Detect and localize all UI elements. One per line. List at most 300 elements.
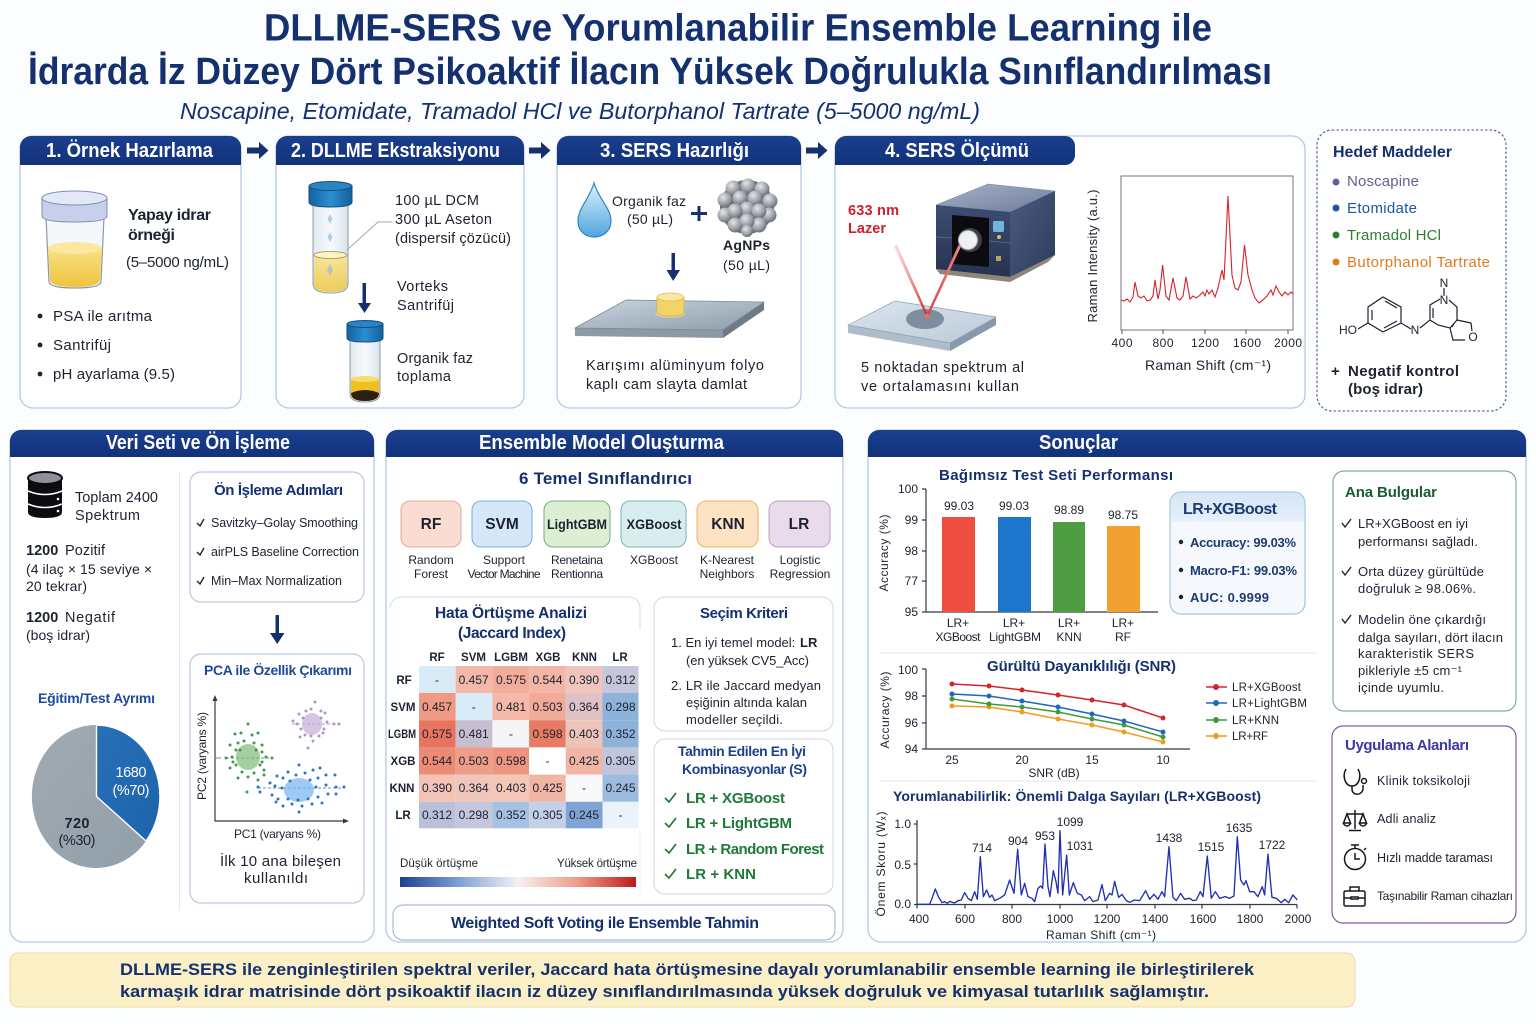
icon: molecule: N (1440, 276, 1448, 290)
box: PCA: kullanıldı (244, 870, 308, 887)
heatmap: 0.403 (496, 781, 526, 795)
list: drugs: Butorphanol Tartrate (1347, 254, 1490, 271)
panel: Ensemble Model Oluşturma (386, 430, 843, 942)
box: selection criteria: modeller seçildi. (686, 712, 783, 727)
icon: stethoscope (1344, 769, 1366, 794)
chart: bar chart: 98.89 (1054, 503, 1084, 517)
box: key findings: doğruluk ≥ 98.06%. (1358, 581, 1476, 596)
box: best combinations: Kombinasyonlar (S) (682, 761, 807, 777)
chart: feature importance: 1438 (1156, 831, 1183, 845)
classifier: LR: Regression (770, 567, 830, 581)
list: drugs: Noscapine (1347, 173, 1419, 190)
color scale legend: Yüksek örtüşme (557, 858, 637, 870)
heatmap: - (618, 808, 622, 822)
classifier: LR: Logistic (780, 553, 820, 567)
box: key findings: Orta düzey gürültüde (1358, 564, 1484, 579)
chart: SNR lines: 98 (905, 689, 918, 703)
box: selection criteria: LR (800, 635, 818, 650)
heatmap: LGBM (388, 729, 416, 741)
list: drugs: Tramadol HCl (1347, 227, 1441, 244)
chart: bar chart: 100 (898, 482, 918, 496)
chart: feature importance: 1800 (1237, 912, 1264, 926)
text: negative: Negatif (65, 610, 116, 626)
classifier: XGBoost (621, 501, 686, 567)
chart: feature importance: 904 (1008, 834, 1028, 848)
arrow: down (666, 253, 680, 281)
box: application areas: Uygulama Alanları (1345, 737, 1469, 754)
chart: bar chart: LightGBM (989, 630, 1041, 644)
legend: SNR (1206, 682, 1307, 743)
chart: PCA scatter: PC2 (varyans %) (195, 712, 209, 800)
heatmap: 0.352 (605, 727, 636, 741)
heatmap: RF (396, 675, 412, 687)
classifier: RF: Forest (414, 567, 449, 581)
box: best combinations (654, 739, 833, 894)
chart: Raman spectrum: 1600 (1233, 336, 1261, 350)
heatmap: RF (429, 652, 445, 664)
icon: database (28, 472, 62, 518)
box: preprocessing: Ön İşleme Adımları (214, 482, 343, 499)
chart: Raman spectrum: 400 (1112, 336, 1133, 350)
box: key findings (1333, 471, 1516, 711)
chart: feature importance: 600 (955, 912, 975, 926)
heatmap: 0.544 (422, 754, 452, 768)
heatmap: 0.245 (605, 781, 636, 795)
chart: bar chart: 98.75 (1108, 508, 1138, 522)
leader line (347, 222, 392, 250)
list: drugs: Etomidate (1347, 200, 1417, 217)
text: measure: ve ortalamasını kullan (861, 379, 1019, 395)
box: soft voting (393, 905, 835, 940)
heatmap: 0.312 (422, 808, 452, 822)
icon: molecule: O (1468, 330, 1478, 344)
chart: pie: (%30) (58, 833, 96, 849)
color scale legend (400, 858, 637, 887)
box: key findings: karakteristik SERS (1358, 646, 1474, 661)
chart: bar chart: LR+ (947, 616, 969, 630)
icon: slide with droplet (575, 293, 764, 338)
classifier: KNN: Neighbors (700, 567, 754, 581)
text: positive: 1200 (26, 543, 58, 559)
heatmap: LR (612, 652, 628, 664)
heatmap: 0.425 (532, 781, 563, 795)
label: laser (848, 203, 899, 237)
text: negative control: (boş idrar) (1348, 381, 1423, 398)
text: negative control: + (1331, 363, 1340, 380)
text: instruction: Karışımı alüminyum folyo (586, 358, 764, 374)
heatmap: 0.298 (605, 700, 636, 714)
panel: Sonuçlar (868, 430, 1526, 942)
heatmap: - (435, 673, 439, 687)
icon: spectrometer (936, 184, 1055, 282)
text: total spectra: Spektrum (75, 508, 140, 524)
classifier: KNN: K-Nearest (700, 553, 755, 567)
box: best combinations: LR + LightGBM (686, 815, 792, 832)
chart: bar chart: XGBoost (936, 630, 981, 644)
box: preprocessing: Min–Max Normalization (211, 574, 342, 588)
box: key findings: LR+XGBoost en iyi (1358, 516, 1468, 531)
heatmap: 0.312 (605, 673, 636, 687)
heatmap: 0.390 (569, 673, 599, 687)
icon: tube with solvent (309, 182, 352, 293)
heatmap: 0.481 (459, 727, 489, 741)
panel: Hedef Maddeler (1317, 130, 1506, 411)
chart: SNR lines: 20 (1015, 753, 1029, 767)
legend: SNR: LR+RF (1232, 731, 1268, 743)
box: selection criteria: eşiğinin altında kalan (686, 695, 807, 710)
box: best combinations: Tahmin Edilen En İyi (678, 743, 806, 759)
footer: conclusion: karmaşık idrar matrisinde dört psikoaktif ilacın iz düzey sınıflandırılmasında yüksek doğruluk ve kimyasal tutarlılık sağlamıştır. (120, 982, 1209, 1001)
heading: Sonuçlar (1039, 432, 1118, 454)
text: instruction: kaplı cam slayta damlat (586, 377, 747, 393)
text: organic phase: Organik faz (397, 351, 473, 367)
chart: Raman spectrum: Raman Shift (cm⁻¹) (1145, 357, 1271, 373)
chart: feature importance: Önem Skoru (Wₓ) (874, 812, 888, 916)
chart: SNR lines: 10 (1156, 753, 1170, 767)
box: key findings: pikleriyle ±5 cm⁻¹ (1358, 663, 1463, 678)
heatmap: 0.364 (459, 781, 489, 795)
chart: bar chart (877, 482, 1158, 644)
panel: Jaccard heatmap (388, 597, 640, 895)
text: organic phase (612, 193, 686, 227)
text: AgNPs: (50 µL) (723, 257, 770, 273)
icon: molecule: N (1440, 293, 1448, 307)
list: drugs (1332, 173, 1490, 271)
chart: feature importance: 714 (972, 841, 992, 855)
classifier: SVM: Vector Machine (468, 567, 541, 581)
text: total spectra (75, 490, 158, 524)
text: measure (861, 360, 1024, 395)
text: negative control (1331, 363, 1459, 398)
chart: bar chart: RF (1115, 630, 1131, 644)
chart: feature importance: 1000 (1047, 912, 1074, 926)
text: reagents: 300 µL Aseton (395, 212, 492, 228)
icon: urine cup (42, 191, 107, 288)
box: application areas: Taşınabilir Raman cihazları (1377, 889, 1513, 903)
heading: step 1: 1. Örnek Hazırlama (46, 139, 214, 162)
subtitle: Noscapine, Etomidate, Tramadol HCl ve Butorphanol Tartrate (5–5000 ng/mL) (180, 98, 980, 124)
chart: feature importance: 400 (909, 912, 929, 926)
chart: pie: 720 (64, 816, 90, 832)
text: positive (26, 543, 152, 594)
classifier: XGBoost: XGBoost (630, 553, 679, 567)
heatmap (388, 652, 638, 828)
chart: Raman spectrum: Raman Intensity (a.u.) (1085, 190, 1100, 322)
chart: SNR lines (878, 663, 1190, 780)
text: negative (26, 610, 116, 643)
chart: SNR lines: 96 (905, 716, 918, 730)
classifier: SVM: Support (483, 553, 526, 567)
heatmap: 0.598 (496, 754, 526, 768)
panel: 3. SERS Hazırlığı (557, 136, 801, 408)
heatmap: LGBM (494, 652, 528, 664)
box: key findings: Modelin öne çıkardığı (1358, 612, 1486, 627)
heatmap: 0.364 (569, 700, 599, 714)
box: selection criteria (654, 597, 833, 731)
text: instruction (586, 358, 764, 393)
heading: step 2: 2. DLLME Ekstraksiyonu (291, 140, 500, 162)
classifier: RF (401, 501, 461, 581)
heatmap: KNN (572, 652, 597, 664)
heatmap: 0.457 (459, 673, 489, 687)
bullet list: PSA ile arıtma (53, 308, 153, 325)
heading: interpretability: Yorumlanabilirlik: Önemli Dalga Sayıları (LR+XGBoost) (893, 788, 1261, 804)
chart: feature importance: 1635 (1226, 821, 1253, 835)
text: reagents (395, 193, 511, 247)
panel: Jaccard heatmap: Hata Örtüşme Analizi (435, 605, 587, 622)
legend: SNR: LR+LightGBM (1232, 698, 1307, 710)
classifier: KNN: KNN (711, 516, 745, 533)
box: key findings: içinde uyumlu. (1358, 680, 1444, 695)
heatmap: SVM (391, 702, 415, 714)
text: sample (126, 207, 229, 271)
icon: molecule: N (1411, 323, 1419, 337)
text: sample: (5–5000 ng/mL) (126, 254, 229, 271)
text: total spectra: Toplam 2400 (75, 490, 158, 506)
chart: feature importance (874, 812, 1312, 942)
legend: SNR: LR+XGBoost (1232, 682, 1302, 694)
heatmap: SVM (461, 652, 486, 664)
box: selection criteria: 1. En iyi temel model: (671, 635, 795, 650)
text: reagents: 100 µL DCM (395, 193, 479, 209)
box: selection criteria: Seçim Kriteri (700, 605, 788, 622)
chart: feature importance: 1515 (1198, 840, 1225, 854)
chart: bar chart: 95 (905, 605, 918, 619)
heading: split: Eğitim/Test Ayrımı (38, 690, 155, 706)
arrow: down (270, 615, 284, 644)
chart: bar chart: LR+ (1112, 616, 1134, 630)
box: PCA: İlk 10 ana bileşen (220, 852, 341, 870)
chart: feature importance: 1.0 (894, 817, 911, 831)
laser beams (894, 244, 961, 318)
text: negative control: Negatif kontrol (1348, 363, 1459, 380)
plus (691, 206, 707, 221)
text: negative: 1200 (26, 610, 58, 626)
heatmap: KNN (390, 783, 414, 795)
text: AgNPs (723, 237, 770, 273)
classifier: LightGBM: Rentionna (551, 567, 603, 581)
text: organic phase: (50 µL) (627, 211, 673, 227)
chart: bar chart: LR+ (1003, 616, 1025, 630)
legend: SNR: LR+KNN (1232, 715, 1279, 727)
chart: feature importance: 1722 (1259, 838, 1286, 852)
chart: pie: (%70) (112, 783, 150, 799)
panel: 4. SERS Ölçümü (835, 136, 1305, 408)
box: LR+XGBoost metrics: Accuracy: 99.03% (1190, 535, 1296, 550)
text: vortex: Vorteks (397, 279, 448, 295)
chart: bar chart: LR+ (1058, 616, 1080, 630)
classifier: XGBoost: XGBoost (626, 516, 682, 532)
arrow: down (358, 283, 371, 313)
chart: bar chart: Accuracy (%) (877, 514, 891, 592)
heading: SNR: Gürültü Dayanıklılığı (SNR) (987, 658, 1176, 675)
text: AgNPs: AgNPs (723, 237, 770, 253)
chart: feature importance: 1031 (1067, 839, 1094, 853)
chart: bar chart: 77 (905, 574, 918, 588)
title: İdrarda İz Düzey Dört Psikoaktif İlacın Yüksek Doğrulukla Sınıflandırılması (28, 51, 1272, 93)
classifier: KNN (697, 501, 758, 581)
heatmap: 0.305 (532, 808, 563, 822)
heatmap: 0.503 (459, 754, 489, 768)
box: LR+XGBoost metrics: AUC: 0.9999 (1190, 590, 1269, 605)
icon: drop (578, 183, 611, 237)
chart: SNR lines: Accuracy (%) (878, 672, 892, 748)
arrow: 2 to 3 (529, 142, 550, 159)
heatmap: 0.481 (496, 700, 526, 714)
classifier: SVM: SVM (485, 516, 519, 533)
text: positive: (4 ilaç × 15 seviye × (26, 561, 152, 577)
icon: molecule: HO (1339, 323, 1357, 337)
classifier: LR: LR (789, 516, 809, 533)
heatmap: 0.544 (532, 673, 563, 687)
chart: Raman spectrum: 800 (1152, 336, 1174, 350)
icon: sample slide (848, 301, 996, 351)
classifier: LightGBM (544, 501, 610, 581)
box: application areas: Hızlı madde taraması (1377, 851, 1493, 865)
heatmap: 0.598 (532, 727, 563, 741)
panel: 2. DLLME Ekstraksiyonu (276, 136, 524, 408)
heatmap: 0.305 (605, 754, 636, 768)
chart: SNR lines: 25 (945, 753, 959, 767)
box: LR+XGBoost metrics: LR+XGBoost (1183, 501, 1278, 518)
heatmap: - (546, 754, 550, 768)
box: application areas (1332, 726, 1516, 923)
heading: test set: Bağımsız Test Seti Performansı (939, 467, 1173, 484)
chart: PCA scatter: PC1 (varyans %) (234, 827, 321, 841)
chart: feature importance: 0.5 (894, 858, 911, 872)
icon: AgNP cluster (718, 178, 778, 237)
classifier: SVM (468, 501, 541, 581)
icon: toolbox (1344, 887, 1365, 906)
text: sample: Yapay idrar (128, 207, 211, 224)
box: PCA (190, 654, 364, 903)
text: sample: örneği (128, 227, 175, 244)
panel: 1. Örnek Hazırlama (20, 136, 241, 408)
title: DLLME-SERS ve Yorumlanabilir Ensemble Learning ile (264, 8, 1212, 50)
chart: feature importance: 1600 (1190, 912, 1217, 926)
chart: SNR lines: 100 (898, 663, 918, 677)
text: negative: (boş idrar) (26, 627, 90, 643)
heatmap: LR (395, 810, 411, 822)
text: organic phase: toplama (397, 369, 452, 385)
heatmap: - (472, 700, 476, 714)
chart: bar chart: 98 (905, 544, 918, 558)
box: PCA: PCA ile Özellik Çıkarımı (204, 662, 352, 678)
footer: conclusion: DLLME-SERS ile zenginleştirilen spektral veriler, Jaccard hata örtüşmesine dayalı yorumlanabilir ensemble learning ile birleştirilerek (120, 960, 1255, 979)
heatmap: 0.457 (422, 700, 452, 714)
heatmap: 0.575 (422, 727, 452, 741)
chart: SNR lines: 15 (1085, 753, 1099, 767)
label: laser: 633 nm (848, 203, 899, 219)
box: preprocessing (190, 472, 364, 602)
chart: PCA scatter (195, 695, 349, 841)
box: best combinations: LR + Random Forest (686, 841, 824, 858)
heading: Veri Seti ve Ön İşleme (106, 431, 290, 454)
icon: stopwatch (1344, 845, 1366, 870)
text: vortex: Santrifüj (397, 298, 454, 314)
color scale legend: Düşük örtüşme (400, 858, 478, 870)
heading: step 3: 3. SERS Hazırlığı (600, 140, 749, 162)
icon: scales (1343, 810, 1367, 830)
classifier: LR (769, 501, 830, 581)
chart: feature importance: Raman Shift (cm⁻¹) (1046, 928, 1156, 942)
heatmap: 0.575 (496, 673, 526, 687)
footer: conclusion (10, 953, 1355, 1007)
classifier: LightGBM: Renetaina (551, 553, 603, 567)
heatmap: 0.352 (496, 808, 526, 822)
chart: Raman spectrum (1085, 176, 1302, 373)
icon: tube organic phase (347, 320, 383, 402)
box: application areas: Klinik toksikoloji (1377, 774, 1470, 788)
heatmap: - (582, 781, 586, 795)
chart: feature importance: 1400 (1142, 912, 1169, 926)
box: key findings: dalga sayıları, dört ilacın (1358, 630, 1503, 645)
box: LR+XGBoost metrics (1170, 492, 1305, 614)
heading: step 4: 4. SERS Ölçümü (885, 139, 1029, 162)
heatmap: XGB (391, 756, 415, 768)
bullet list: pH ayarlama (9.5) (53, 366, 175, 383)
chart: SNR lines: 94 (905, 742, 918, 756)
chart: bar chart: 99.03 (999, 499, 1029, 513)
heading: classifiers: 6 Temel Sınıflandırıcı (519, 469, 692, 488)
heading: Ensemble Model Oluşturma (479, 432, 725, 454)
heatmap: 0.390 (422, 781, 452, 795)
chart: SNR lines: SNR (dB) (1028, 766, 1080, 780)
box: selection criteria: (en yüksek CV5_Acc) (686, 653, 809, 668)
box: soft voting: Weighted Soft Voting ile Ensemble Tahmin (451, 915, 759, 932)
chart: pie (32, 725, 160, 868)
box: application areas: Adli analiz (1377, 812, 1436, 826)
box: LR+XGBoost metrics: Macro-F1: 99.03% (1190, 563, 1297, 578)
chart: bar chart: 99.03 (944, 499, 974, 513)
text: organic phase: Organik faz (612, 193, 686, 209)
classifier: RF: RF (421, 516, 441, 533)
label: laser: Lazer (848, 221, 886, 237)
chart: feature importance: 953 (1035, 829, 1055, 843)
arrow: 3 to 4 (806, 142, 828, 159)
heatmap: XGB (536, 652, 560, 664)
box: key findings: performansı sağladı. (1358, 534, 1478, 549)
text: reagents: (dispersif çözücü) (395, 231, 511, 247)
chart: feature importance: 1099 (1057, 815, 1084, 829)
heatmap: 0.245 (569, 808, 599, 822)
chart: pie: 1680 (116, 765, 146, 781)
heatmap: - (509, 727, 513, 741)
chart: bar chart: 99 (905, 513, 918, 527)
chart: feature importance: 0.0 (894, 897, 911, 911)
icon: molecule (1339, 276, 1478, 344)
box: best combinations: LR + XGBoost (686, 790, 785, 807)
text: positive: 20 tekrar) (26, 578, 87, 594)
bullet list: Santrifüj (53, 337, 111, 354)
box: key findings: Ana Bulgular (1345, 484, 1437, 501)
panel: Veri Seti ve Ön İşleme (10, 430, 374, 942)
chart: feature importance: 800 (1002, 912, 1022, 926)
chart: feature importance: 2000 (1285, 912, 1312, 926)
heatmap: 0.403 (569, 727, 599, 741)
box: best combinations: LR + KNN (686, 866, 756, 883)
text: measure: 5 noktadan spektrum al (861, 360, 1024, 376)
classifier: LightGBM: LightGBM (547, 516, 607, 532)
box: selection criteria: 2. LR ile Jaccard medyan (671, 678, 821, 693)
text: positive: Pozitif (65, 543, 106, 559)
chart: feature importance: 1200 (1094, 912, 1121, 926)
heatmap: 0.503 (532, 700, 563, 714)
heading: targets: Hedef Maddeler (1333, 144, 1452, 161)
heatmap: 0.425 (569, 754, 599, 768)
text: vortex (397, 279, 454, 314)
bullet list (38, 308, 175, 383)
